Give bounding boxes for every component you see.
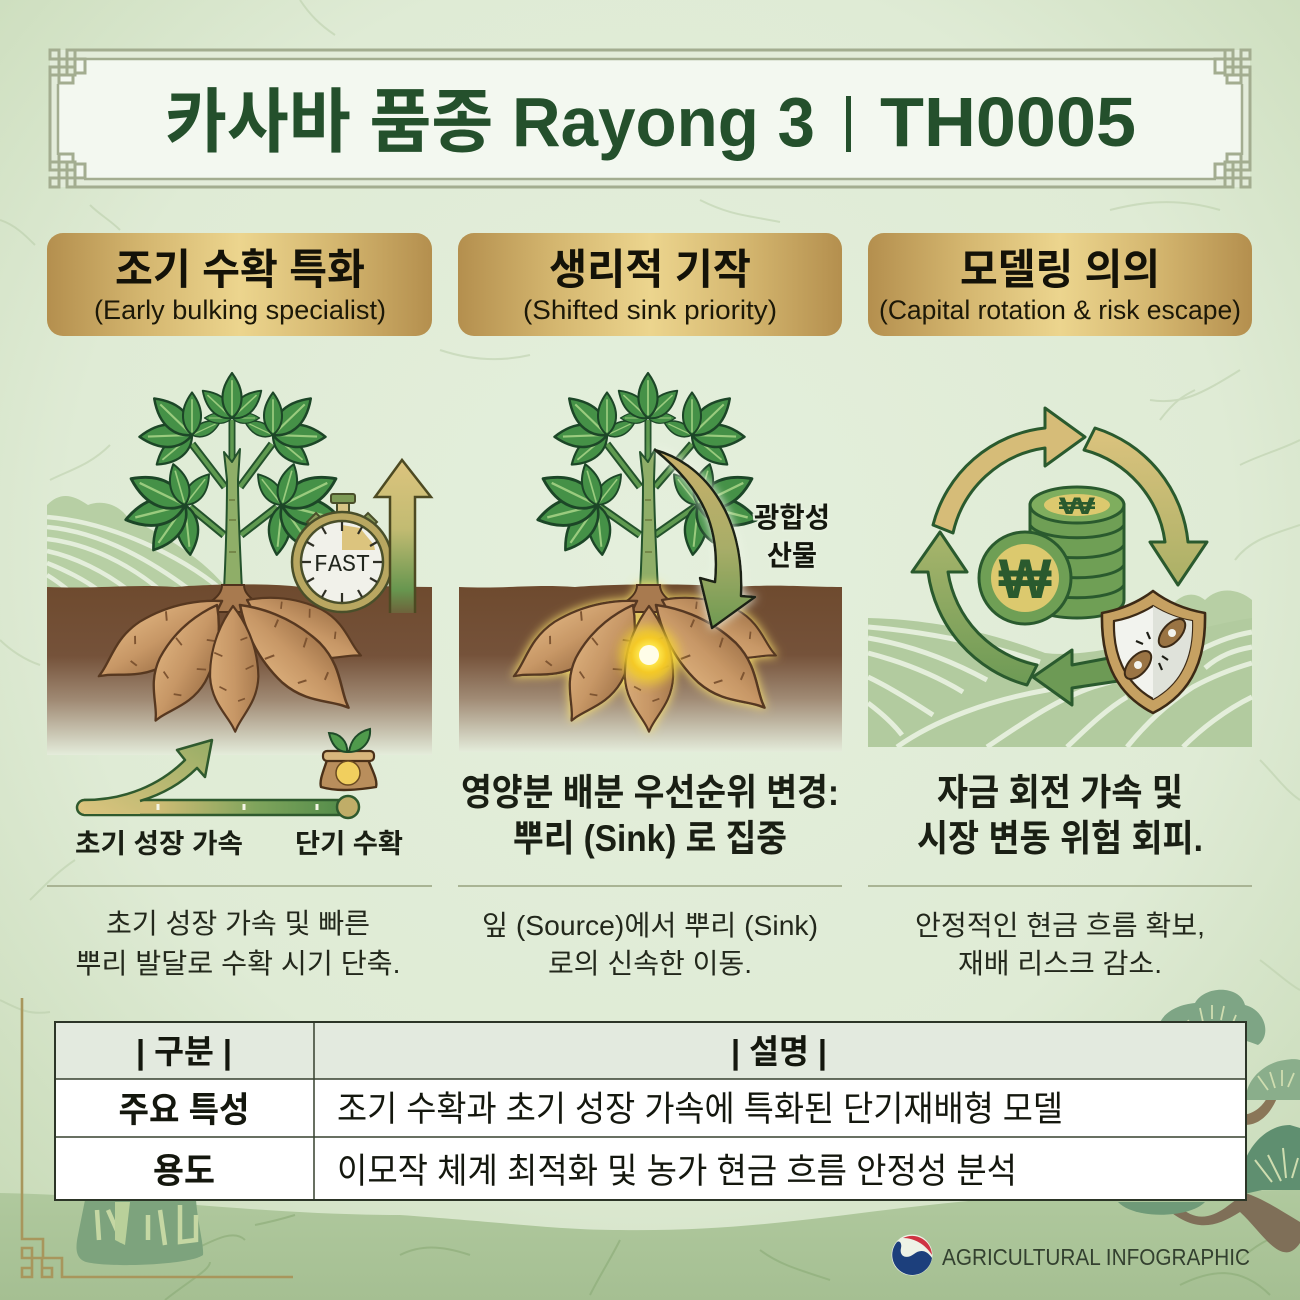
label: photosynthate: 산물 (767, 540, 817, 571)
panel 2 heading text (461, 772, 839, 859)
icon: seedling sack (321, 729, 376, 790)
panel 2: sink priority illustration (459, 373, 842, 752)
stopwatch icon (292, 494, 392, 612)
panel 1: growth bar and labels (75, 729, 403, 859)
footer text: AGRICULTURAL INFOGRAPHIC (942, 1244, 1250, 1270)
footer logo and credit (892, 1234, 1250, 1276)
panel 3 heading text (917, 772, 1203, 859)
coin stack: ₩ (1059, 493, 1096, 520)
label: early growth: 초기 성장 가속 (75, 829, 243, 859)
cycle arrow: bottom (1033, 650, 1125, 705)
table header: | 설명 | (731, 1033, 827, 1070)
panel 1 description: 초기 성장 가속 및 빠른 (106, 908, 370, 939)
heading badge: modeling significance: (Capital rotation & risk escape) (879, 295, 1241, 325)
summary table (55, 1022, 1246, 1200)
panel 3 heading text: 자금 회전 가속 및 (937, 772, 1183, 813)
panel 3: capital rotation illustration (868, 408, 1252, 747)
front won coin (979, 532, 1071, 624)
glowing sink core (619, 625, 679, 685)
panel 2 description: 로의 신속한 이동. (548, 948, 752, 979)
heading badge: modeling significance (868, 233, 1252, 336)
panel 1 description (76, 908, 400, 979)
panel 1: cassava plant illustration (47, 373, 432, 755)
panel 2 description: 잎 (Source)에서 뿌리 (Sink) (482, 910, 818, 941)
title text: 카사바 품종 Rayong 3 (165, 83, 815, 161)
title separator (846, 96, 851, 152)
heading badge: sink priority (458, 233, 842, 336)
growth up arrow (375, 460, 431, 613)
photosynthate flow arrow (655, 450, 755, 628)
table row: main traits: 주요 특성 (118, 1091, 250, 1130)
front won coin: ₩ (999, 547, 1052, 610)
heading badge: sink priority: 생리적 기작 (549, 246, 751, 293)
heading badge: early bulking: (Early bulking specialist) (94, 295, 386, 325)
label: short-term harvest: 단기 수확 (295, 829, 403, 859)
cycle arrow: right (1084, 428, 1207, 585)
panel 3 description: 재배 리스크 감소. (958, 948, 1162, 979)
label: photosynthate (754, 502, 830, 571)
tubers (86, 578, 371, 733)
cycle arrow: left (912, 532, 1037, 685)
panel 3 heading text: 시장 변동 위험 회피. (917, 818, 1203, 859)
title banner (50, 50, 1250, 187)
label: photosynthate: 광합성 (754, 502, 830, 533)
variety code: TH0005 (880, 83, 1136, 161)
pine tree decoration (1118, 990, 1300, 1252)
soil (459, 584, 842, 752)
heading badge: early bulking (47, 233, 432, 336)
soil (47, 584, 432, 755)
stopwatch icon: FAST (314, 552, 370, 579)
icon: taegeuk emblem (892, 1234, 932, 1276)
table row: use: 이모작 체계 최적화 및 농가 현금 흐름 안정성 분석 (337, 1152, 1017, 1191)
growth timeline bar (77, 740, 359, 818)
carved stone decoration (76, 1200, 203, 1265)
glowing tubers (501, 578, 786, 733)
cycle arrow: top (933, 408, 1085, 533)
plant stem and leaves (535, 373, 760, 590)
field background (47, 496, 228, 590)
table row: use: 용도 (153, 1152, 215, 1191)
panel 3 description: 안정적인 현금 흐름 확보, (915, 910, 1205, 941)
coin stack (1030, 487, 1124, 618)
table header (136, 1033, 827, 1070)
plant stem and leaves (123, 373, 344, 590)
bottom-left gold frame ornament (22, 998, 293, 1277)
panel 3 description (915, 910, 1205, 979)
shield with broken chain (1102, 591, 1205, 713)
panel 2 description (482, 910, 818, 979)
table row: main traits: 조기 수확과 초기 성장 가속에 특화된 단기재배형 모델 (337, 1090, 1063, 1129)
table header: | 구분 | (136, 1033, 232, 1070)
panel 2 heading text: 영양분 배분 우선순위 변경: (461, 772, 839, 813)
panel 2 heading text: 뿌리 (Sink) 로 집중 (513, 818, 787, 859)
heading badge: sink priority: (Shifted sink priority) (523, 295, 777, 325)
field background (868, 591, 1252, 747)
panel 1 description: 뿌리 발달로 수확 시기 단축. (76, 948, 400, 979)
heading badge: early bulking: 조기 수확 특화 (115, 246, 365, 293)
heading badge: modeling significance: 모델링 의의 (960, 246, 1160, 293)
